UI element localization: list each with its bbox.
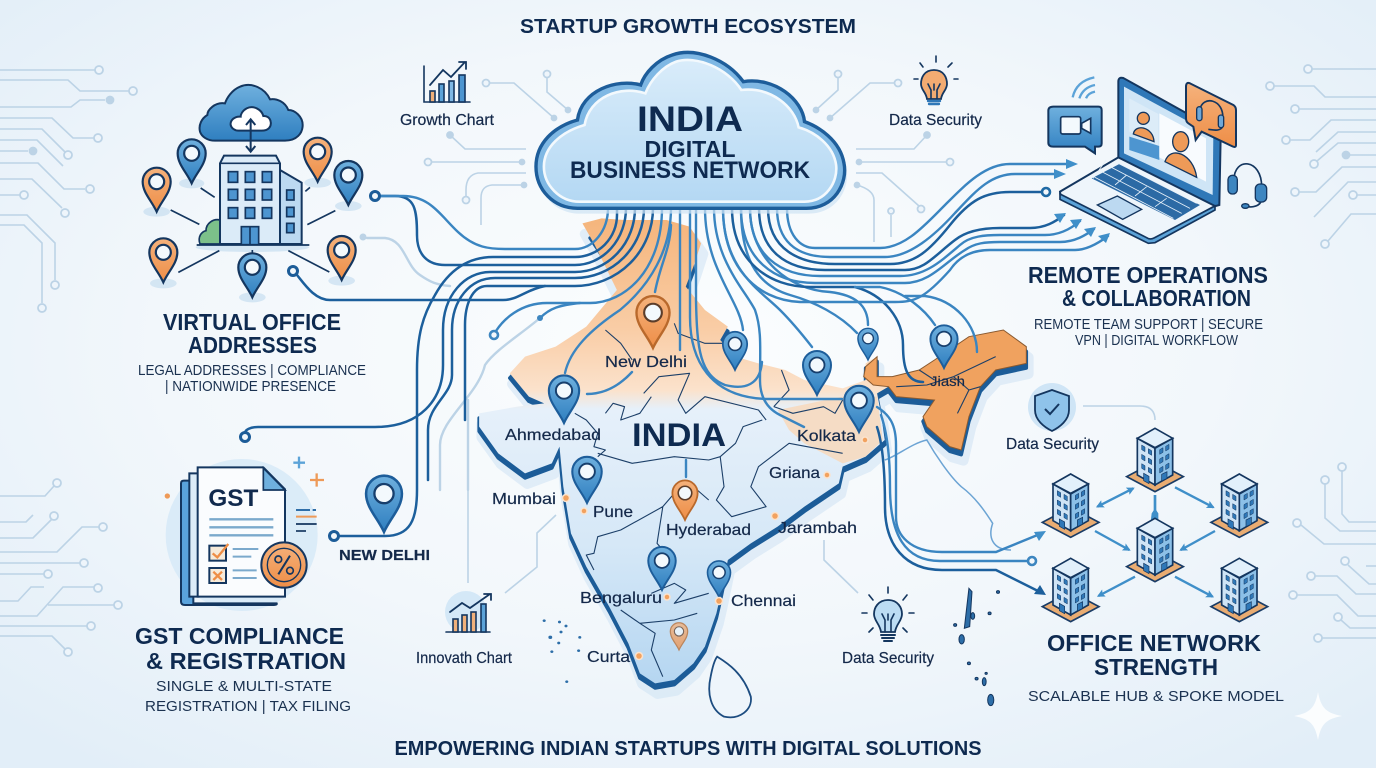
icon: data security shield bbox=[1028, 383, 1076, 431]
heading: addresses: ADDRESSES bbox=[188, 332, 317, 358]
india map bbox=[479, 218, 1029, 717]
panel: remote operations bbox=[1028, 77, 1268, 349]
gst illustration bbox=[165, 457, 324, 611]
icon: growth chart bbox=[424, 62, 470, 102]
laptop illustration bbox=[1048, 77, 1267, 243]
network lines: to northeast and jiash bbox=[732, 200, 923, 382]
map halo bbox=[481, 229, 1029, 694]
tower: left bbox=[1042, 474, 1099, 537]
chat bubble: video bbox=[1048, 107, 1102, 153]
map labels: Jiash bbox=[930, 373, 965, 389]
label: data security right: Data Security bbox=[1006, 436, 1099, 453]
location pins bbox=[178, 139, 206, 183]
map labels: Jarambah bbox=[778, 520, 857, 537]
heading: office network: OFFICE NETWORK bbox=[1047, 630, 1261, 656]
map land bbox=[479, 218, 1026, 683]
label: data security bottom: Data Security bbox=[842, 650, 934, 667]
heading: virtual office: VIRTUAL OFFICE bbox=[163, 309, 341, 335]
circuit traces around cloud bbox=[424, 70, 1155, 593]
sparkle bbox=[1294, 692, 1342, 740]
headset bbox=[1234, 164, 1262, 207]
tower: right bbox=[1211, 474, 1268, 537]
cloud subtitle line 1: DIGITAL bbox=[644, 136, 736, 162]
cloud subtitle line 2: BUSINESS NETWORK bbox=[570, 157, 811, 184]
pin: new delhi left bbox=[366, 476, 402, 532]
circuit pattern: top left bbox=[0, 66, 137, 312]
tower: central hub bbox=[1127, 495, 1183, 582]
circuit pattern: bottom left bbox=[0, 479, 122, 656]
map labels: Mumbai bbox=[492, 491, 556, 508]
title: STARTUP GROWTH ECOSYSTEM bbox=[520, 16, 856, 38]
gst illustration: GST bbox=[208, 485, 259, 512]
network lines: centre fan bbox=[690, 200, 868, 427]
office building bbox=[280, 170, 302, 244]
network lines: to office network bbox=[877, 407, 1040, 592]
label: growth chart: Growth Chart bbox=[400, 112, 495, 129]
map labels: INDIA bbox=[632, 417, 726, 453]
icon: light bulb bottom bbox=[862, 587, 914, 641]
bush bbox=[199, 220, 220, 244]
map labels: Chennai bbox=[731, 593, 796, 610]
cloud: india digital business network bbox=[536, 52, 847, 214]
heading: remote operations: REMOTE OPERATIONS bbox=[1028, 262, 1268, 288]
icon: light bulb top bbox=[914, 56, 958, 104]
map labels: Pune bbox=[593, 504, 633, 521]
heading: strength: STRENGTH bbox=[1094, 654, 1218, 680]
region: northeast india bbox=[864, 330, 1026, 450]
sri lanka bbox=[709, 657, 751, 717]
map labels: Ahmedabad bbox=[505, 427, 601, 444]
map pins bbox=[549, 296, 958, 650]
city markers bbox=[562, 437, 868, 660]
connector arrows bbox=[1095, 487, 1215, 597]
map labels: Griana bbox=[769, 465, 820, 482]
andaman islands bbox=[954, 588, 1000, 706]
hub and spoke network bbox=[1042, 428, 1268, 622]
laptop base bbox=[1060, 157, 1215, 240]
description: LEGAL ADDRESSES | COMPLIANCE bbox=[138, 363, 366, 379]
cloud shape bbox=[536, 52, 847, 214]
cloud title: INDIA bbox=[637, 100, 743, 139]
map labels bbox=[492, 354, 965, 666]
circuit pattern: top right bbox=[1266, 65, 1376, 248]
description: SINGLE & MULTI-STATE bbox=[156, 679, 332, 695]
map labels: Curta bbox=[587, 649, 630, 666]
description: REMOTE TEAM SUPPORT | SECURE bbox=[1034, 317, 1263, 333]
region: west bengal bbox=[778, 397, 883, 463]
description line 2: | NATIONWIDE PRESENCE bbox=[165, 379, 336, 395]
small cloud bbox=[200, 85, 303, 141]
heading: registration: & REGISTRATION bbox=[146, 648, 346, 674]
map labels: New Delhi bbox=[605, 354, 687, 371]
label: data security top: Data Security bbox=[889, 112, 982, 129]
state borders bbox=[575, 323, 996, 677]
tower: bottom left bbox=[1042, 558, 1099, 622]
map labels: Hyderabad bbox=[666, 522, 751, 539]
chat bubble: headset bbox=[1186, 83, 1236, 147]
pin connectors bbox=[171, 187, 335, 272]
panel: virtual office addresses bbox=[138, 85, 366, 395]
network lines: left fan bbox=[245, 196, 653, 536]
bottom tagline: EMPOWERING INDIAN STARTUPS WITH DIGITAL SOLUTIONS bbox=[394, 738, 982, 760]
panel: gst compliance bbox=[135, 457, 351, 715]
description line 2: REGISTRATION | TAX FILING bbox=[145, 699, 351, 715]
panel: office network strength bbox=[1028, 428, 1284, 705]
description line 2: VPN | DIGITAL WORKFLOW bbox=[1075, 333, 1238, 349]
rings and arrowheads at line ends bbox=[240, 159, 1110, 595]
description: SCALABLE HUB & SPOKE MODEL bbox=[1028, 689, 1284, 705]
label: new delhi left: NEW DELHI bbox=[339, 547, 430, 564]
icon: innovation chart bbox=[445, 591, 491, 633]
myanmar coast bbox=[885, 440, 1011, 550]
network lines: faint branches bbox=[367, 238, 540, 490]
heading: gst compliance: GST COMPLIANCE bbox=[135, 623, 344, 649]
wifi waves bbox=[1073, 77, 1095, 98]
circuit pattern: bottom right bbox=[1289, 463, 1376, 642]
lakshadweep islands bbox=[543, 619, 581, 683]
virtual office illustration bbox=[143, 85, 362, 302]
laptop screen bbox=[1118, 78, 1221, 207]
map shadow bbox=[479, 238, 1026, 688]
network lines: to laptop bbox=[723, 164, 1108, 302]
heading: collaboration: & COLLABORATION bbox=[1062, 285, 1251, 311]
map labels: Bengaluru bbox=[580, 590, 662, 607]
tower: top bbox=[1127, 428, 1183, 492]
map labels: Kolkata bbox=[797, 428, 856, 445]
tower: bottom right bbox=[1211, 558, 1268, 622]
label: innovath chart: Innovath Chart bbox=[416, 650, 513, 667]
